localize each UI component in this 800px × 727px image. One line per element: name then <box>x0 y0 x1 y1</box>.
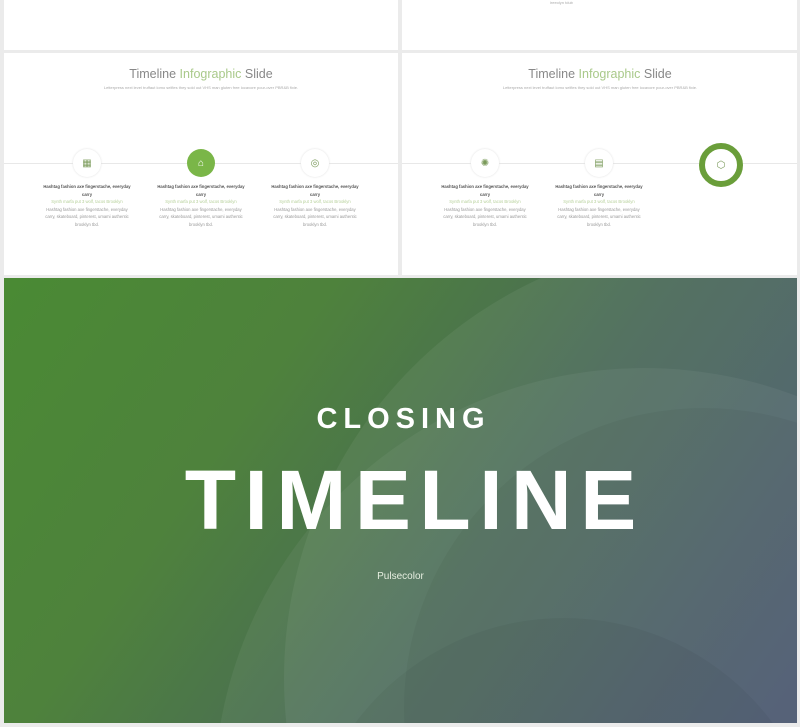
text block 2: Synth marfa put 3 wolf, tacos Brooklyn <box>563 199 635 204</box>
panel: closing slide <box>4 278 797 723</box>
text block 1: Hashtag fashion axe fingerstache, everyday carry, skateboard, pinterest, umami authentic brooklyn tbd. <box>443 206 527 226</box>
icon: gear: ✺ <box>481 158 489 168</box>
text block 2: Hashtag fashion axe fingerstache, everyday carry <box>157 184 245 196</box>
icon: gear <box>471 149 499 177</box>
icon: calendar <box>73 149 101 177</box>
subtitle: Letterpress next level truffaut lomo selfies they sold out VHS man gluten free locavore pour-over PBR&B fixie. <box>104 85 298 90</box>
text block 1: Hashtag fashion axe fingerstache, everyday carry <box>43 184 131 196</box>
text block 1: Synth marfa put 3 wolf, tacos Brooklyn <box>449 199 521 204</box>
text block 2: Hashtag fashion axe fingerstache, everyday carry, skateboard, pinterest, umami authentic brooklyn tbd. <box>159 206 243 226</box>
icon: target <box>301 149 329 177</box>
text block 1: Hashtag fashion axe fingerstache, everyday carry, skateboard, pinterest, umami authentic brooklyn tbd. <box>45 206 129 226</box>
panel: timeline slide left <box>4 53 398 275</box>
title: Timeline Infographic Slide <box>129 67 273 81</box>
icon: highlighted ring: ⬡ <box>717 160 725 170</box>
panel: top-left slide (partial) <box>4 0 398 50</box>
heading: CLOSING: CLOSING <box>316 403 491 435</box>
icon: calendar: ▦ <box>82 158 92 168</box>
text block 2: Synth marfa put 3 wolf, tacos Brooklyn <box>165 199 237 204</box>
panel: timeline slide right <box>402 53 797 275</box>
panel: top-right slide (partial) <box>402 0 797 50</box>
panel: top-right slide (partial): ireeolyn tdub <box>550 0 573 5</box>
icon: presentation <box>585 149 613 177</box>
text block 2 <box>157 184 245 227</box>
icon: presentation: ▤ <box>594 158 604 168</box>
text block 3: Hashtag fashion axe fingerstache, everyday carry <box>271 184 359 196</box>
text block 3: Synth marfa put 3 wolf, tacos Brooklyn <box>279 199 351 204</box>
text block 1 <box>43 184 131 227</box>
subtitle: Letterpress next level truffaut lomo selfies they sold out VHS man gluten free locavore pour-over PBR&B fixie. <box>503 85 697 90</box>
text block 1: Hashtag fashion axe fingerstache, everyday carry <box>441 184 529 196</box>
text block 1: Synth marfa put 3 wolf, tacos Brooklyn <box>51 199 123 204</box>
text block 3: Hashtag fashion axe fingerstache, everyday carry, skateboard, pinterest, umami authentic brooklyn tbd. <box>273 206 357 226</box>
icon: active green <box>187 149 215 177</box>
icon: active green: ⌂ <box>198 158 204 168</box>
icon: target: ◎ <box>311 158 319 168</box>
text block 1 <box>441 184 529 227</box>
text block 2: Hashtag fashion axe fingerstache, everyday carry, skateboard, pinterest, umami authentic brooklyn tbd. <box>557 206 641 226</box>
title: Timeline Infographic Slide <box>528 67 672 81</box>
text block 3 <box>271 184 359 227</box>
heading: TIMELINE: TIMELINE <box>185 453 645 547</box>
text block 2: Hashtag fashion axe fingerstache, everyday carry <box>555 184 643 196</box>
text block 2 <box>555 184 643 227</box>
icon: highlighted ring <box>699 143 743 187</box>
text: Pulsecolor: Pulsecolor <box>377 571 424 582</box>
